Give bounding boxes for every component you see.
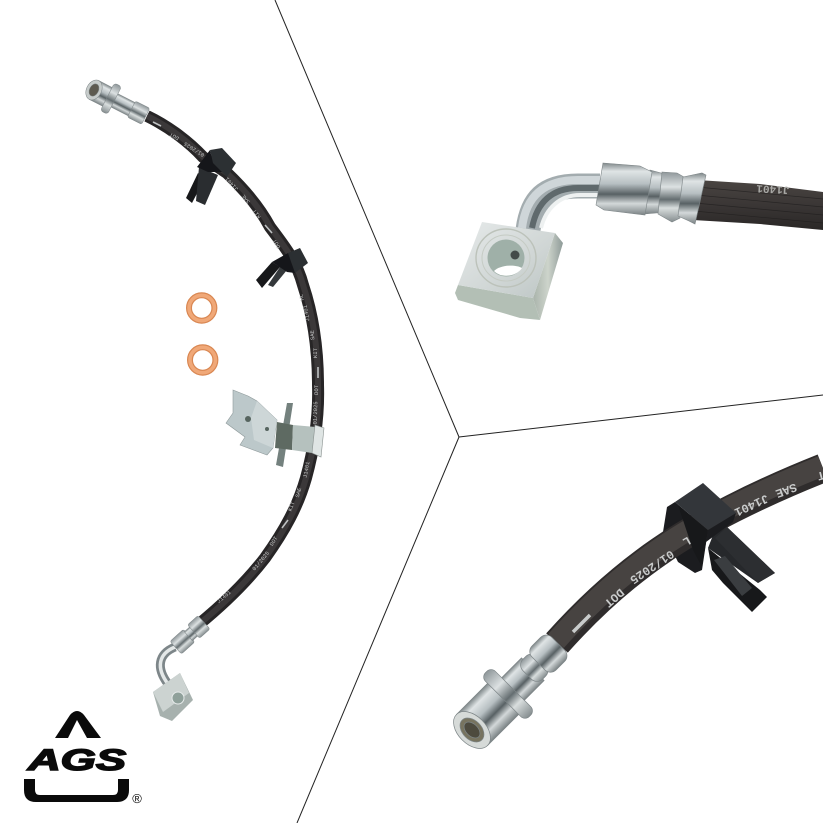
hose markings close-up: SAE (773, 480, 799, 500)
hose markings close-up: J1401 (732, 491, 771, 519)
clip top cap (675, 483, 775, 596)
hose markings: DOT (271, 237, 282, 250)
hose markings: KIT (251, 207, 262, 220)
logo triangle apex (55, 711, 101, 738)
crimped ferrule (596, 163, 706, 224)
clip block 1 (197, 148, 236, 177)
hose markings: KIT (287, 500, 297, 512)
panel: banjo fitting close-up (455, 163, 823, 320)
icon: copper washers (189, 295, 215, 373)
top threaded fitting (80, 73, 153, 130)
hose markings: J1401 (302, 304, 311, 322)
bottom banjo fitting (153, 616, 210, 721)
lower plastic clip 1 (186, 167, 218, 205)
panel: full brake hose assembly (80, 73, 324, 721)
clip block 2 (272, 248, 308, 273)
hose markings close-up (601, 467, 823, 610)
panel: clip and threaded fitting close-up (440, 466, 823, 762)
logo base bracket (24, 779, 129, 802)
banjo block (455, 222, 563, 320)
black hose close-up (693, 180, 823, 230)
hose stripes (153, 122, 318, 528)
metal bracket (226, 390, 324, 467)
logo wordmark: AGS (26, 744, 126, 777)
threaded fitting close-up (440, 622, 580, 762)
hose markings close-up: L (680, 533, 693, 548)
hose markings: 01/2025 (183, 140, 206, 158)
hose markings: SAE (240, 192, 252, 205)
bent steel tube (522, 180, 600, 230)
hose markings: J1401 (302, 460, 312, 478)
black hose close-up: J1401 (756, 181, 790, 195)
hose markings: HL (297, 293, 306, 301)
logo: AGS (24, 711, 142, 806)
hose markings: 01/2025 (312, 401, 319, 425)
hose markings close-up: 01/2025 (627, 547, 676, 586)
hose markings: SAE (309, 329, 316, 340)
registered mark: ® (132, 791, 142, 806)
hose markings: SAE (294, 486, 303, 498)
hose markings (168, 131, 320, 605)
clip rear frame and arms (663, 502, 775, 612)
hose markings: 01/2025 (251, 550, 271, 572)
hose markings: J1401 (223, 175, 240, 192)
hose stripe (573, 615, 590, 632)
hose markings: DOT (168, 131, 180, 142)
black rubber hose (147, 116, 318, 625)
hose markings close-up: DOT (601, 585, 627, 610)
hose markings: J1401 (215, 588, 233, 605)
hose markings: KIT (312, 347, 319, 358)
hose markings: DOT (313, 384, 320, 395)
hose markings: DOT (268, 535, 280, 547)
lower plastic clip 2 (256, 262, 287, 288)
panel dividers (275, 0, 823, 823)
black hose close-up (556, 466, 823, 643)
